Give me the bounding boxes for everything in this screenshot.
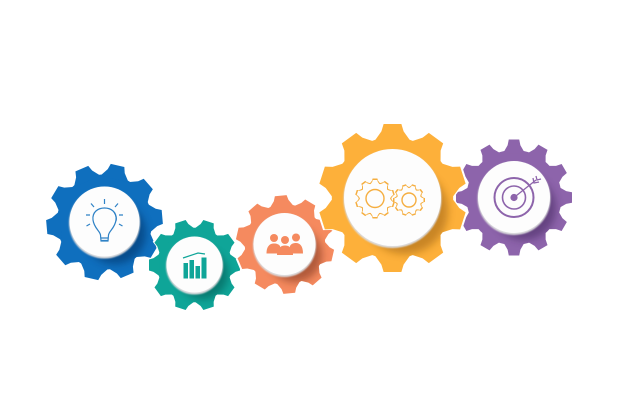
gear: orange team [236, 195, 334, 294]
gear: teal chart [149, 220, 240, 310]
shadow: purple gear [500, 183, 559, 244]
shadow: teal gear [178, 249, 228, 299]
shadow: yellow gear [374, 178, 452, 258]
gear: blue lightbulb [46, 164, 163, 280]
infographic: five connected gears [46, 124, 572, 310]
icon: bar chart with trend line [183, 253, 206, 278]
shadow: blue gear [84, 202, 146, 264]
icon: two cogs [354, 178, 430, 220]
shadow: orange gear [268, 228, 322, 282]
gear: yellow cogs [314, 122, 471, 274]
icon: target with arrow [494, 176, 541, 217]
hub: teal gear [166, 238, 223, 294]
hub: purple gear [478, 162, 550, 235]
hub: orange gear [253, 214, 316, 277]
gear: purple target [456, 140, 572, 256]
icon: group of people [266, 234, 303, 255]
hub: blue gear [69, 188, 140, 258]
hub: yellow gear [344, 150, 442, 248]
icon: lightbulb [86, 199, 123, 241]
